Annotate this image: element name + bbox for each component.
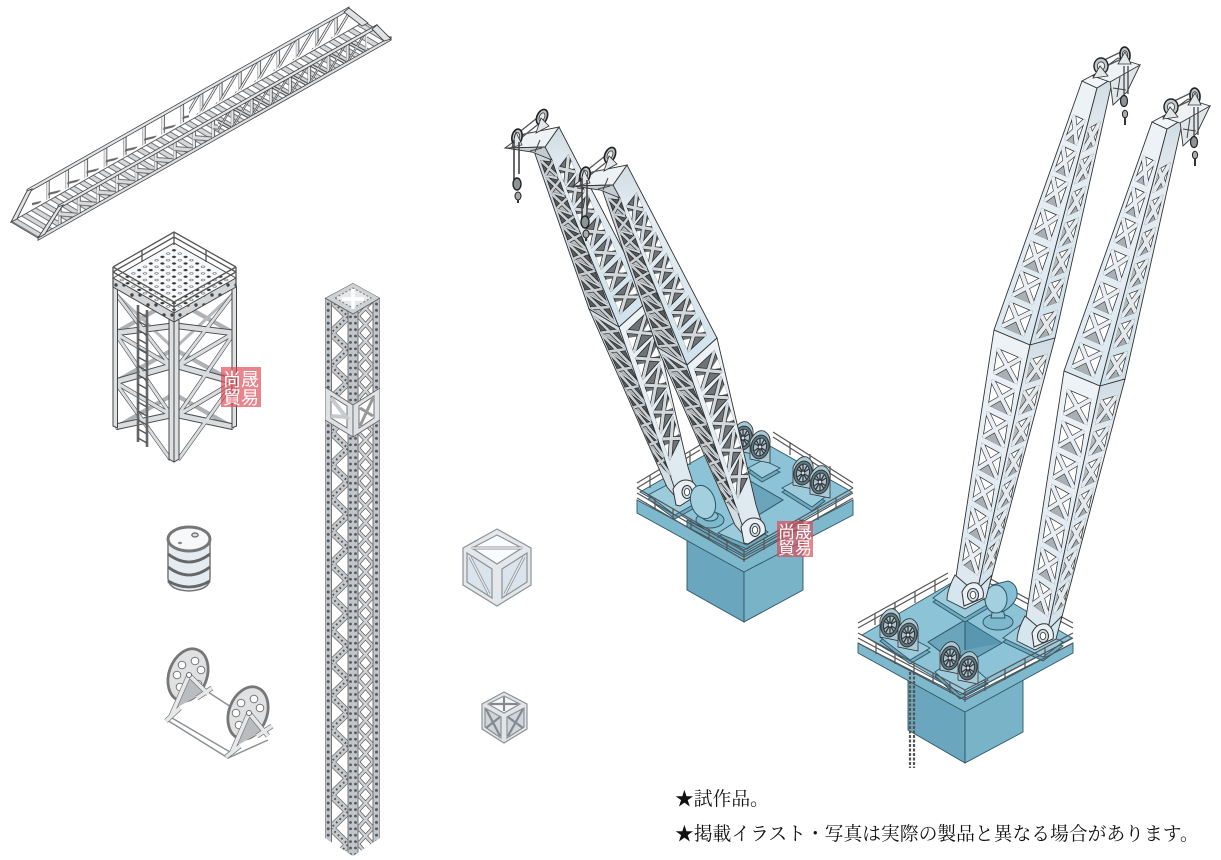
hatch opening (928, 620, 1002, 667)
oil drum (168, 527, 210, 591)
watermark stamp right: 尚晟 (778, 523, 812, 542)
deck side band (637, 500, 853, 572)
raised pad sides (880, 587, 1063, 699)
back railing (637, 432, 853, 488)
crate small (482, 692, 527, 743)
tower legs (113, 286, 236, 462)
tower right face braces (178, 293, 234, 460)
drum (983, 581, 1017, 630)
reel wheel back (161, 643, 215, 721)
tower left face braces (115, 293, 171, 460)
bridge truss (11, 7, 391, 240)
pedestal (908, 670, 1023, 763)
deck side band (858, 643, 1073, 712)
watermark stamp right: 貿易 (778, 539, 812, 558)
bridge floor slats (11, 22, 391, 238)
crane D (1017, 88, 1210, 650)
note: disclaimer: ★掲載イラスト・写真は実際の製品と異なる場合があります。 (675, 823, 1199, 845)
drum (686, 482, 724, 528)
column frame section (325, 387, 380, 437)
hatch opening (735, 478, 783, 516)
watermark stamp left: 貿易 (223, 388, 259, 408)
raised pads (648, 460, 825, 545)
note: prototype: ★試作品。 (675, 788, 769, 810)
tower ladder (138, 305, 147, 447)
raised pads (880, 583, 1063, 695)
tower back braces (115, 293, 234, 349)
left crane scene (505, 108, 853, 622)
front railing (637, 488, 853, 562)
column left face (331, 298, 348, 858)
column right face (358, 298, 373, 858)
crate large (463, 529, 531, 606)
watermark stamp left (221, 367, 261, 408)
pedestal (687, 520, 803, 622)
tower perforated deck (113, 243, 236, 322)
right crane scene (858, 47, 1210, 768)
column top cap (325, 283, 380, 314)
column strips (325, 290, 380, 860)
crane B (573, 146, 765, 544)
bridge end posts (11, 8, 391, 238)
winch spools (879, 609, 979, 684)
platform tower (113, 232, 236, 462)
raised pad sides (648, 464, 825, 549)
front truss (38, 17, 391, 240)
crane A (505, 108, 697, 506)
back truss (27, 7, 349, 211)
hanging ladder (910, 672, 914, 768)
deck top (640, 432, 852, 552)
back railing (858, 573, 1073, 628)
winch spools (732, 422, 831, 498)
tower railing (113, 232, 236, 320)
deck top (862, 575, 1072, 695)
crane C (947, 47, 1140, 609)
lattice column (325, 283, 380, 860)
tower centre leg edge (173, 322, 175, 462)
watermark stamp right (777, 521, 813, 558)
front railing (858, 633, 1073, 702)
reel base frame (167, 692, 268, 758)
reel wheel front (221, 681, 275, 757)
watermark stamp left: 尚晟 (223, 370, 259, 390)
cable reel (161, 643, 275, 758)
tower back beams (115, 300, 234, 428)
